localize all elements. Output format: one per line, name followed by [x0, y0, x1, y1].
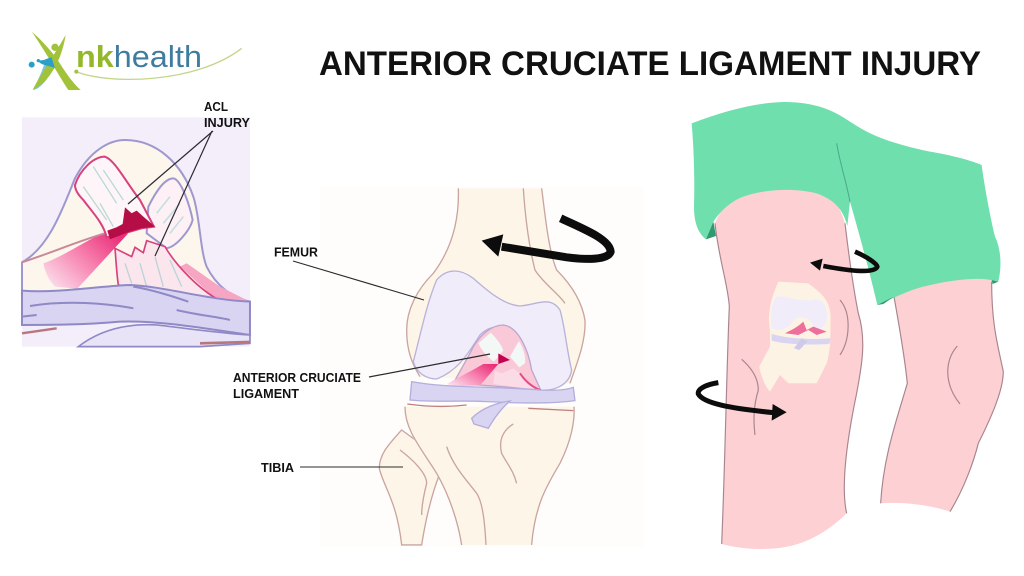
logo swoosh	[76, 48, 242, 79]
bone dome	[22, 140, 250, 310]
label: tibia: TIBIA	[261, 461, 294, 475]
arrow: upper twist	[810, 252, 877, 271]
title: ANTERIOR CRUCIATE LIGAMENT INJURY	[319, 45, 981, 83]
label: anterior cruciate ligament: LIGAMENT	[233, 387, 299, 401]
rotation arrow	[482, 218, 611, 259]
label: ACL injury	[204, 100, 251, 130]
panel background	[22, 117, 250, 347]
torn ligament	[75, 157, 154, 237]
femur	[407, 188, 585, 383]
rear ligament	[147, 178, 193, 248]
logo wordmark: nkhealth	[76, 39, 202, 74]
logo: nkhealth	[29, 32, 242, 90]
label: ACL injury: INJURY	[204, 116, 251, 130]
left leg	[715, 178, 863, 549]
label: ACL injury: ACL	[204, 100, 228, 114]
cartilage	[413, 271, 572, 390]
arrow: lower twist	[698, 383, 787, 421]
meniscus flap	[472, 401, 510, 428]
panel: legs with knee twist	[692, 102, 1003, 549]
leader lines	[128, 131, 213, 256]
shorts	[692, 102, 1000, 305]
icon: logo figure	[29, 32, 81, 90]
ACL in knee	[447, 325, 542, 391]
panel: knee anatomy	[233, 187, 643, 547]
label: femur: FEMUR	[274, 246, 318, 260]
blush shading	[43, 233, 128, 289]
tear	[107, 207, 155, 239]
panel: ACL injury close-up	[22, 100, 251, 347]
fibula	[379, 430, 440, 545]
lower ligament	[115, 241, 220, 301]
right leg	[881, 270, 1003, 512]
label: anterior cruciate ligament	[233, 354, 490, 401]
meniscus	[410, 382, 575, 403]
tendon bands	[22, 285, 250, 335]
label: anterior cruciate ligament: ANTERIOR CRUCIATE	[233, 371, 361, 385]
tibia	[405, 407, 574, 545]
mini knee	[759, 282, 831, 392]
label: femur	[274, 246, 424, 300]
knee background	[320, 187, 643, 547]
